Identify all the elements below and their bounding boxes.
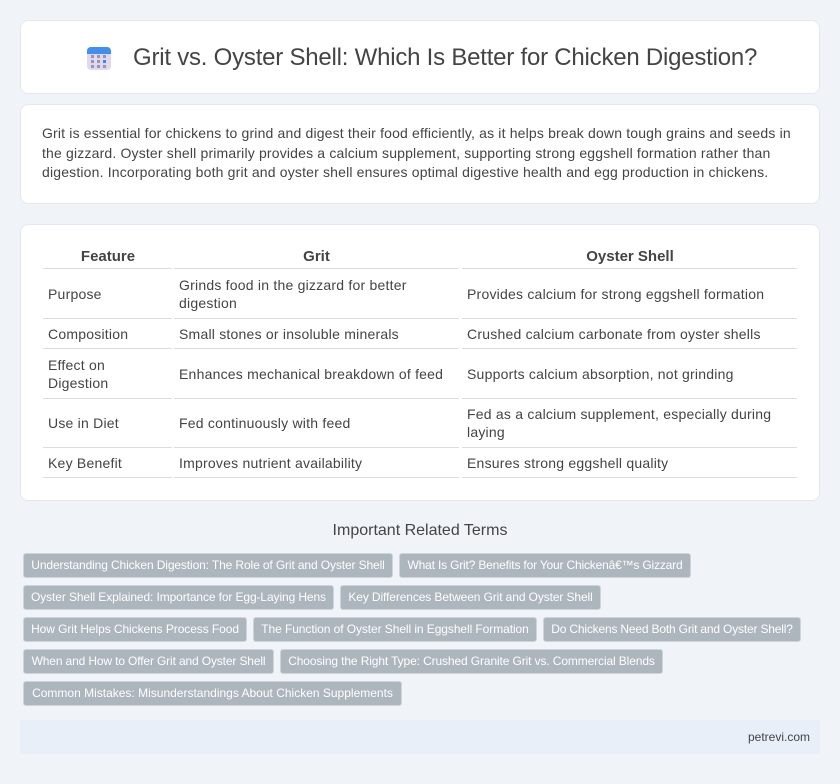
footer bar	[20, 720, 820, 754]
table header: Feature	[81, 248, 135, 265]
tag list: related terms: When and How to Offer Grit and Oyster Shell	[32, 654, 265, 668]
row: key benefit: Improves nutrient availability	[179, 455, 362, 471]
panel: header	[20, 20, 820, 94]
row: effect on digestion: Supports calcium absorption, not grinding	[467, 366, 734, 382]
row: use in diet: Use in Diet	[48, 415, 119, 431]
tag list: related terms: Do Chickens Need Both Grit and Oyster Shell?	[551, 622, 793, 636]
row: composition	[48, 326, 761, 342]
panel: comparison table	[20, 224, 820, 501]
tag list: related terms: Oyster Shell Explained: Importance for Egg-Laying Hens	[31, 590, 326, 604]
title: Grit vs. Oyster Shell: Which Is Better for Chicken Digestion?	[133, 44, 757, 71]
row: use in diet: Fed as a calcium supplement, especially during	[467, 406, 771, 422]
row: purpose: Grinds food in the gizzard for better	[179, 277, 407, 293]
row: key benefit	[48, 455, 668, 471]
intro paragraph: digestion. Incorporating both grit and oyster shell ensures optimal digestive health and egg production in chickens.	[42, 164, 768, 180]
tag list: related terms	[23, 553, 801, 706]
tag list: related terms: Common Mistakes: Misunderstandings About Chicken Supplements	[32, 686, 393, 700]
row: composition: Composition	[48, 326, 128, 342]
row: purpose	[48, 277, 764, 311]
table header	[81, 248, 674, 265]
tag list: related terms: Choosing the Right Type: Crushed Granite Grit vs. Commercial Blends	[288, 654, 655, 668]
row: key benefit: Key Benefit	[48, 455, 122, 471]
tag list: related terms: What Is Grit? Benefits for Your Chickenâ€™s Gizzard	[408, 558, 682, 572]
row: effect on digestion: Digestion	[48, 375, 108, 391]
intro paragraph: Grit is essential for chickens to grind and digest their food efficiently, as it helps break down tough grains and seeds in	[42, 125, 791, 141]
tag list: related terms: How Grit Helps Chickens Process Food	[31, 622, 239, 636]
tag list: related terms: Understanding Chicken Digestion: The Role of Grit and Oyster Shell	[31, 558, 385, 572]
intro paragraph	[42, 125, 791, 180]
row: effect on digestion: Effect on	[48, 357, 105, 373]
row: effect on digestion	[48, 357, 734, 391]
row: composition: Crushed calcium carbonate from oyster shells	[467, 326, 761, 342]
row: purpose: Purpose	[48, 286, 102, 302]
icon: calendar	[87, 47, 111, 70]
row: key benefit: Ensures strong eggshell quality	[467, 455, 668, 471]
row: purpose: Provides calcium for strong eggshell formation	[467, 286, 764, 302]
footer source text: petrevi.com	[748, 730, 810, 744]
row: use in diet: laying	[467, 424, 505, 440]
heading: related terms: Important Related Terms	[333, 522, 507, 539]
row: use in diet: Fed continuously with feed	[179, 415, 350, 431]
tag list: related terms: The Function of Oyster Shell in Eggshell Formation	[261, 622, 529, 636]
tag list: related terms: Key Differences Between Grit and Oyster Shell	[348, 590, 593, 604]
row: purpose: digestion	[179, 295, 237, 311]
intro paragraph: the gizzard. Oyster shell primarily provides a calcium supplement, supporting strong eggshell formation rather than	[42, 145, 770, 161]
row: use in diet	[48, 406, 771, 440]
row: composition: Small stones or insoluble minerals	[179, 326, 399, 342]
table header: Grit	[303, 248, 330, 265]
row: effect on digestion: Enhances mechanical breakdown of feed	[179, 366, 443, 382]
table header: Oyster Shell	[586, 248, 674, 265]
panel: intro text	[20, 104, 820, 204]
